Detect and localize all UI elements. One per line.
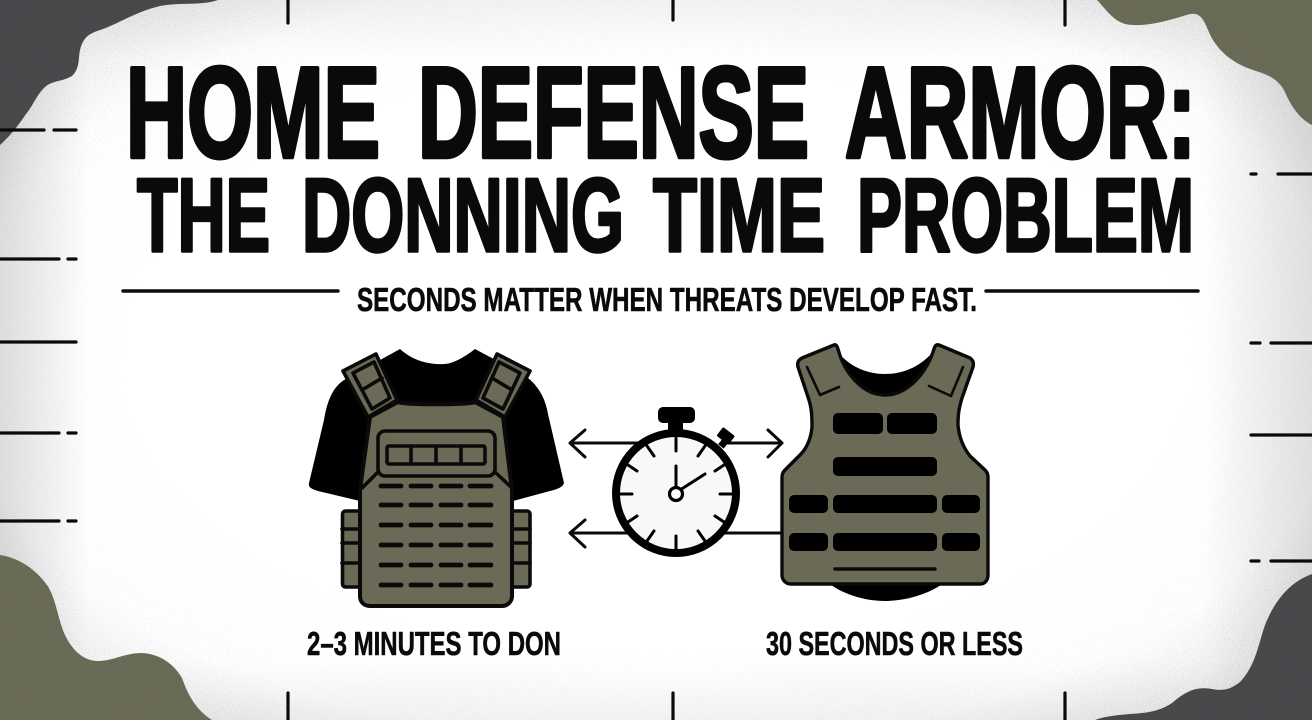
icon: concealable soft vest xyxy=(782,345,988,601)
hands xyxy=(676,466,705,490)
neck and hem lining xyxy=(825,345,947,601)
shoulder seams xyxy=(807,367,963,396)
tick marks xyxy=(620,438,733,549)
laser-cut slots xyxy=(381,486,491,585)
icon: stopwatch with arrows xyxy=(570,407,784,553)
camo corner: bottom-right xyxy=(1095,574,1312,720)
vest body xyxy=(782,345,988,584)
title line 2: DONNING xyxy=(302,158,624,274)
arrows xyxy=(570,430,784,547)
title xyxy=(126,41,1196,274)
camo corner: top-right xyxy=(1097,0,1312,125)
label: plate carrier time: 2–3 MINUTES TO DON xyxy=(307,625,561,662)
title line 2 xyxy=(137,158,1194,274)
shoulder strap: right xyxy=(476,354,530,417)
camo corner: top-left xyxy=(0,0,218,145)
hem line xyxy=(835,567,935,571)
title line 1: HOME xyxy=(126,41,380,185)
subtitle: SECONDS MATTER WHEN THREATS DEVELOP FAST. xyxy=(357,281,977,318)
side button xyxy=(716,427,735,445)
side flap: right xyxy=(510,511,530,587)
camo corner: bottom-left xyxy=(0,555,212,720)
hub xyxy=(670,488,682,500)
black shirt xyxy=(309,349,564,501)
crown xyxy=(658,407,695,423)
shoulder strap: left xyxy=(343,354,397,417)
subtitle rule: left xyxy=(123,289,338,293)
title line 2: TIME xyxy=(653,158,825,274)
subtitle rule: right xyxy=(986,289,1198,293)
title line 2: THE xyxy=(137,158,270,274)
carrier plate xyxy=(360,402,512,606)
side flap: left xyxy=(342,511,362,587)
label: soft vest time: 30 SECONDS OR LESS xyxy=(766,625,1023,662)
title line 1: DEFENSE xyxy=(418,41,809,185)
icon: plate carrier over black shirt xyxy=(309,349,564,606)
title line 1 xyxy=(126,41,1196,185)
dial xyxy=(616,433,736,553)
webbing slots xyxy=(789,413,980,551)
admin pocket xyxy=(360,431,512,490)
